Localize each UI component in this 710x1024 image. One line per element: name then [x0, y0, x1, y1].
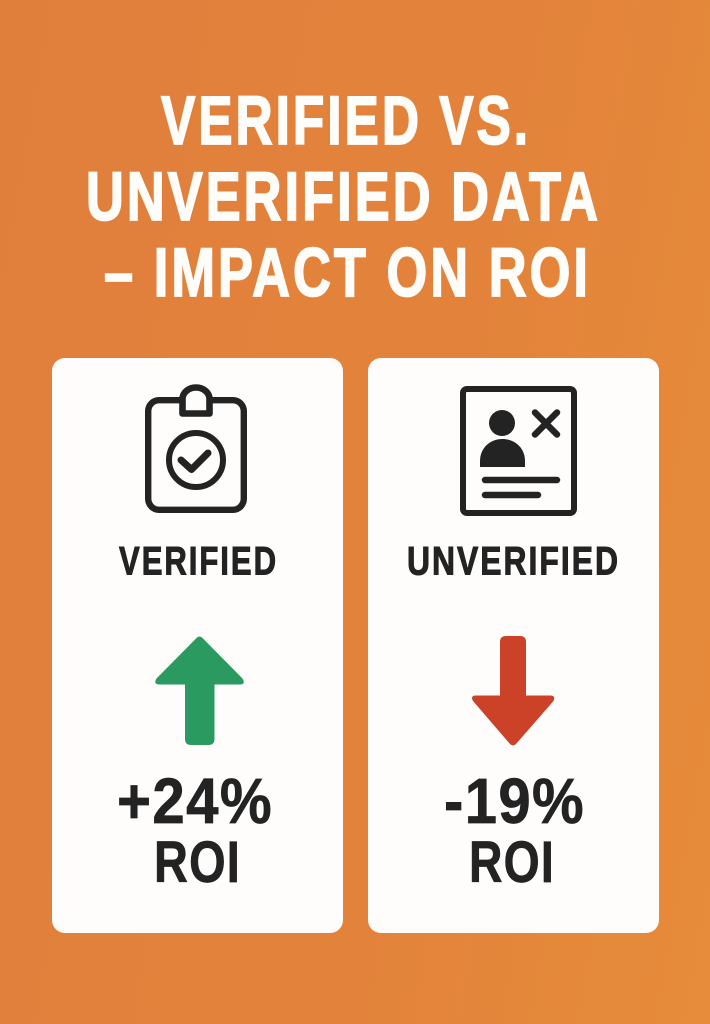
- icon: red down arrow: [472, 636, 554, 746]
- title: VERIFIED VS.: [161, 82, 531, 159]
- stat: +24% ROI: +24%: [117, 765, 273, 837]
- stat: -19% ROI: [444, 765, 585, 895]
- icon: profile with x: [463, 389, 574, 513]
- panel: verified: [52, 358, 343, 933]
- panel: unverified: [368, 358, 659, 933]
- label: unverified: UNVERIFIED: [407, 540, 620, 584]
- title: [86, 82, 601, 311]
- icon: green up arrow: [155, 636, 244, 745]
- icon: clipboard with check: [148, 388, 244, 510]
- stat: +24% ROI: [117, 765, 273, 895]
- stat: -19% ROI: -19%: [444, 765, 585, 837]
- label: verified: VERIFIED: [119, 540, 278, 584]
- stat: +24% ROI: ROI: [154, 830, 241, 895]
- stat: -19% ROI: ROI: [469, 830, 555, 895]
